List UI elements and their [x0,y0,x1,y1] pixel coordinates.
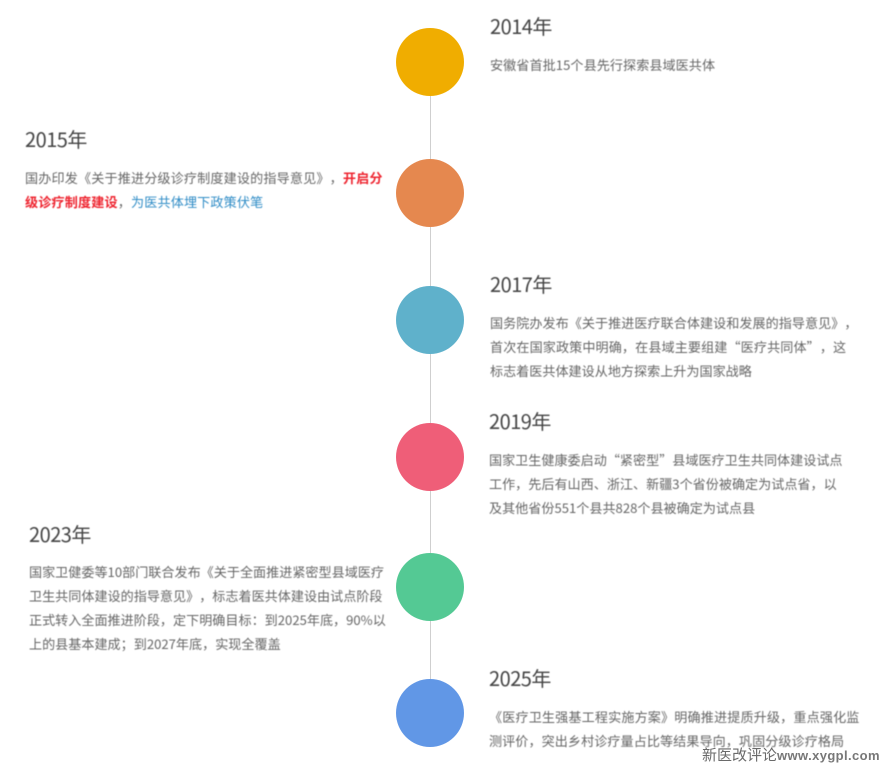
event text: 2023: 国家卫健委等10部门联合发布《关于全面推进紧密型县域医疗 [29,562,384,581]
event text: 2019: 工作，先后有山西、浙江、新疆3个省份被确定为试点省，以 [489,474,837,493]
event text: 2019: 及其他省份551个县共828个县被确定为试点县 [489,498,755,517]
event text: 2015: 国办印发《关于推进分级诊疗制度建设的指导意见》，开启分 [25,168,383,187]
event text: 2025: 测评价，突出乡村诊疗量占比等结果导向，巩固分级诊疗格局 [489,731,844,750]
event text: 2015: 2015年 [25,124,87,153]
event text: 2017: 国务院办发布《关于推进医疗联合体建设和发展的指导意见》， [490,313,857,332]
timeline node 2014 [396,28,464,96]
event text: 2017: 首次在国家政策中明确，在县域主要组建“医疗共同体”，这 [490,337,846,356]
timeline node 2017 [396,286,464,354]
event text: 2017 [490,269,857,380]
event text: 2019: 国家卫生健康委启动“紧密型”县域医疗卫生共同体建设试点 [489,450,843,469]
event text: 2023 [29,519,386,653]
event text: 2023: 卫生共同体建设的指导意见》，标志着医共体建设由试点阶段 [29,586,383,605]
event text: 2017: 标志着医共体建设从地方探索上升为国家战略 [490,361,752,380]
event text: 2014: 安徽省首批15个县先行探索县域医共体 [490,55,715,74]
watermark: 新医改评论www.xygpl.com [702,747,880,764]
event text: 2023: 2023年 [29,519,91,548]
event text: 2017: 2017年 [490,269,552,298]
event text: 2014 [490,11,716,74]
event text: 2025: 2025年 [489,663,551,692]
event text: 2025 [489,663,860,750]
timeline node 2025 [396,679,464,747]
timeline node 2019 [396,423,464,491]
event text: 2025: 《医疗卫生强基工程实施方案》明确推进提质升级，重点强化监 [489,707,860,726]
event text: 2015 [24,124,383,211]
event text: 2019: 2019年 [489,406,551,435]
event text: 2023: 正式转入全面推进阶段，定下明确目标：到2025年底，90%以 [29,610,386,629]
event text: 2023: 上的县基本建成；到2027年底，实现全覆盖 [29,634,281,653]
timeline node 2023 [396,552,464,620]
event text: 2015: 级诊疗制度建设，为医共体埋下政策伏笔 [25,192,263,211]
timeline node 2015 [396,158,464,226]
event text: 2014: 2014年 [490,11,552,40]
timeline axis [430,60,431,714]
event text: 2019 [489,406,843,517]
